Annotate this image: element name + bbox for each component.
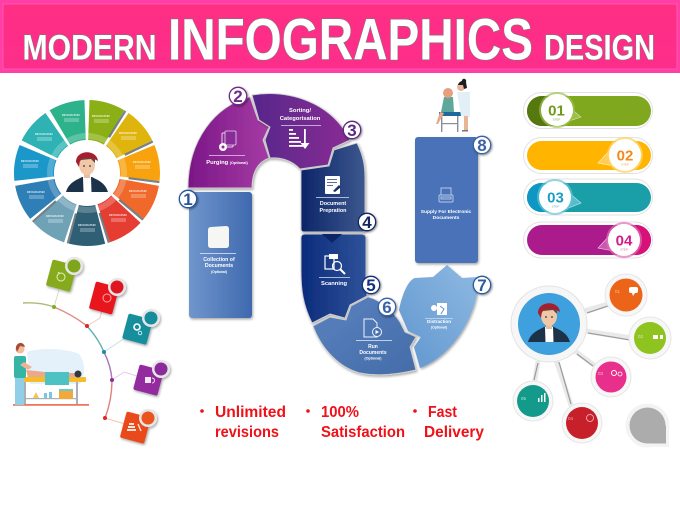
bar 02: 02	[617, 148, 633, 164]
benefit: 100% satisfaction: 100%	[321, 404, 359, 421]
step 7: distraction: (Optional)	[431, 326, 447, 330]
step 6: run documents: (Optional)	[365, 356, 382, 360]
wheel segment labels: INFOGRAPHIC	[62, 113, 80, 117]
badge 2	[229, 87, 247, 106]
bar 02	[524, 137, 652, 174]
badge 4	[358, 213, 376, 232]
step bars	[524, 92, 652, 258]
badge 6	[378, 298, 396, 317]
badge 3	[343, 121, 361, 140]
title text: DESIGN	[544, 28, 655, 68]
bar 02: STEP	[621, 162, 629, 166]
title text: INFOGRAPHICS	[168, 8, 533, 72]
card: teal	[122, 309, 160, 345]
node 02 green: 02	[638, 334, 644, 339]
badge 3: 3	[347, 121, 357, 140]
node 01 orange: 01	[615, 289, 621, 294]
step 5: scanning	[301, 234, 367, 323]
step 6: run documents	[313, 297, 416, 375]
bar 01	[524, 92, 652, 128]
badge 8	[473, 136, 491, 155]
benefit: 100% satisfaction: Satisfaction	[321, 424, 405, 441]
circular wheel infographic	[7, 91, 169, 254]
bar 04: 04	[616, 232, 633, 250]
bar 04	[524, 222, 652, 258]
node 04 red	[562, 403, 602, 443]
card: orange	[120, 409, 157, 444]
wheel segment labels	[21, 113, 151, 232]
step 4: document preparation	[301, 143, 365, 232]
wheel segment labels: INFOGRAPHIC	[92, 114, 110, 118]
title text: MODERN	[22, 28, 156, 68]
benefits list	[200, 404, 484, 441]
node 05 teal	[513, 381, 553, 421]
node 03 pink: 03	[598, 371, 604, 376]
step 8: supply for electronic documents	[415, 137, 478, 263]
badge 4: 4	[362, 213, 372, 232]
wheel segment labels: INFOGRAPHIC	[109, 213, 127, 217]
step 6: run documents: Documents	[359, 350, 387, 356]
badge 1	[179, 190, 197, 209]
step 4: document preparation: Document	[320, 201, 346, 207]
connectors	[534, 303, 632, 408]
benefit: fast delivery	[413, 404, 484, 441]
badge 7: 7	[477, 276, 487, 295]
bar 01: 01	[548, 102, 565, 120]
wheel segment labels: INFOGRAPHIC	[35, 132, 53, 136]
badge 5: 5	[366, 276, 376, 295]
wheel segment labels: INFOGRAPHIC	[129, 189, 147, 193]
bar 03: 03	[547, 190, 564, 206]
card: green	[46, 257, 83, 292]
wheel segment labels: INFOGRAPHIC	[46, 214, 64, 218]
benefit: unlimited revisions: Unlimited	[215, 404, 286, 421]
bar 01: STEP	[553, 118, 560, 122]
step 4: document preparation: Prepration	[320, 208, 346, 214]
massage scene illustration	[13, 343, 89, 406]
node 01 orange	[605, 274, 647, 316]
timeline arc	[23, 290, 137, 424]
badge 8: 8	[477, 136, 487, 155]
step 2: purging: Purging (Optional)	[206, 160, 248, 166]
benefit: unlimited revisions	[200, 404, 286, 441]
wheel segment labels: INFOGRAPHIC	[27, 190, 45, 194]
step 7: distraction: Distraction	[427, 319, 451, 324]
node 04 red: 04	[568, 416, 574, 421]
node 05 teal: 05	[521, 396, 527, 401]
wheel segment labels: INFOGRAPHIC	[78, 223, 96, 227]
bar 03	[524, 179, 652, 215]
step 1: collection of documents: (Optional)	[211, 270, 227, 274]
step 1: collection of documents: Documents	[205, 263, 233, 269]
badge 1: 1	[183, 190, 193, 209]
benefit: fast delivery: Fast	[428, 404, 458, 421]
badge 5	[362, 276, 380, 295]
step 2: purging	[188, 97, 269, 188]
step 1: collection of documents	[189, 192, 252, 318]
network avatar	[528, 303, 570, 342]
badge 6: 6	[382, 298, 392, 317]
doctor and patient illustration	[436, 79, 470, 132]
step 3: sorting	[252, 94, 350, 169]
card: red	[89, 278, 126, 315]
massage arc infographic	[13, 257, 170, 444]
bar 04: STEP	[620, 248, 628, 252]
gray drop node	[626, 404, 670, 448]
wheel segment labels: INFOGRAPHIC	[119, 131, 137, 135]
process flow serpentine	[179, 87, 491, 375]
node 02 green	[629, 317, 671, 359]
wheel segment labels: INFOGRAPHIC	[133, 160, 151, 164]
main avatar node	[511, 286, 587, 362]
badge 7	[473, 276, 491, 295]
wheel segment labels: INFOGRAPHIC	[21, 159, 39, 163]
network diagram	[511, 274, 671, 448]
step 6: run documents: Run	[368, 344, 378, 350]
step 8: supply for electronic documents: Supply For Electronic	[421, 209, 472, 215]
benefit: 100% satisfaction	[306, 404, 405, 441]
badge 2: 2	[233, 87, 243, 106]
title banner	[0, 0, 680, 73]
step 3: sorting: Sorting/	[289, 108, 311, 114]
number badges	[179, 87, 491, 317]
node 03 pink	[591, 357, 631, 397]
step 7: distraction	[399, 265, 478, 368]
step 3: sorting: Categorisation	[280, 116, 321, 122]
step 8: supply for electronic documents: Documents	[433, 215, 460, 221]
step 5: scanning: Scanning	[321, 281, 348, 287]
benefit: fast delivery: Delivery	[424, 424, 484, 441]
bar 03: STEP	[552, 204, 559, 208]
card: purple	[133, 360, 170, 396]
step 1: collection of documents: Collection of	[203, 257, 235, 263]
wheel avatar	[66, 152, 108, 192]
benefit: unlimited revisions: revisions	[215, 424, 279, 441]
